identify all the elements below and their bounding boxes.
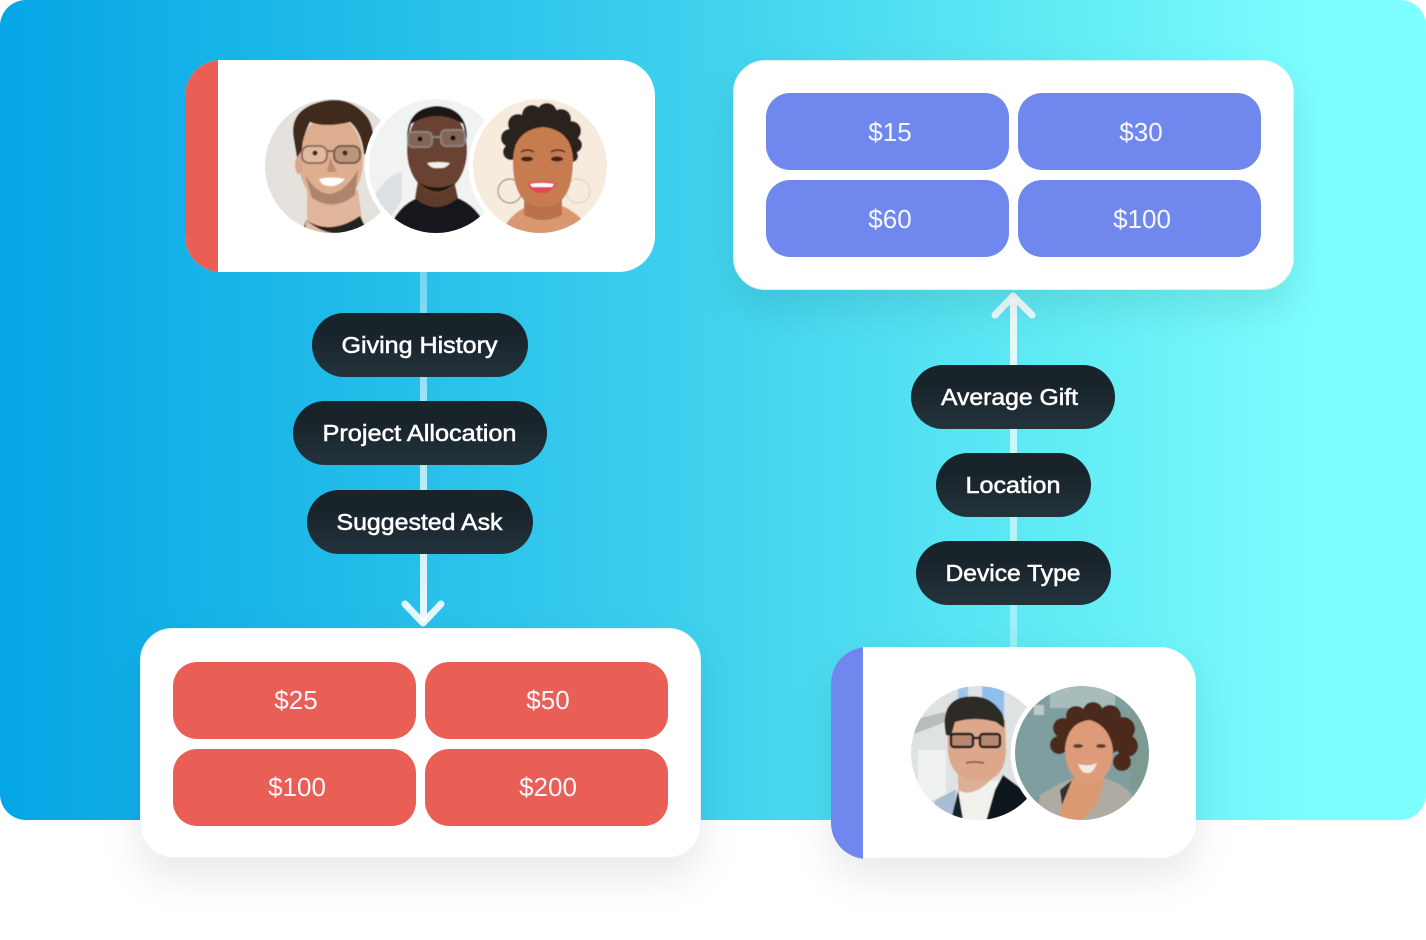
panel: donor group with three portraits: [185, 60, 655, 272]
pill: Device Type: [916, 541, 1111, 605]
amount button $25: $25: [274, 685, 318, 715]
amount button $15: $15: [868, 117, 912, 147]
amount button $30: [1018, 93, 1261, 170]
amount button $100: [173, 749, 416, 826]
portrait: woman with curly brown hair: [1010, 682, 1154, 824]
amount button $60: $60: [868, 204, 912, 234]
amount button $15: [766, 93, 1009, 170]
pill: Giving History: Giving History: [342, 332, 498, 358]
amount button $60: [766, 180, 1009, 257]
amount button $200: $200: [519, 772, 577, 802]
portrait: man in black shirt: [364, 94, 508, 238]
pill: Suggested Ask: [307, 490, 533, 554]
pill: Giving History: [312, 313, 528, 377]
amount button $50: $50: [526, 685, 570, 715]
amount button $50: [425, 662, 668, 739]
pill: Project Allocation: Project Allocation: [322, 420, 516, 446]
pill: Location: Location: [966, 472, 1060, 498]
amount button $25: [173, 662, 416, 739]
amount button $30: $30: [1119, 117, 1163, 147]
panel: donor group with two portraits: [831, 647, 1196, 859]
pill: Average Gift: Average Gift: [941, 384, 1078, 410]
pill: Location: [936, 453, 1091, 517]
connector arrow: donor card up to blue amounts: [995, 296, 1032, 648]
pill: Device Type: Device Type: [946, 560, 1080, 586]
panel: red suggested amounts: [140, 628, 700, 858]
connector arrow: donor card down to red amounts: [405, 272, 441, 623]
amount button $100: $100: [268, 772, 326, 802]
pill: Project Allocation: [293, 401, 547, 465]
portrait: man with black glasses and blazer: [911, 686, 1027, 820]
portrait: man with glasses and brown hair: [265, 99, 381, 233]
red accent strip: [185, 60, 218, 272]
portrait: woman with short curly hair: [468, 94, 612, 238]
amount button $100: [1018, 180, 1261, 257]
amount button $200: [425, 749, 668, 826]
panel: blue suggested amounts: [734, 60, 1294, 290]
amount button $100: $100: [1113, 204, 1171, 234]
pill: Average Gift: [911, 365, 1115, 429]
blue accent strip: [831, 647, 863, 859]
pill: Suggested Ask: Suggested Ask: [336, 509, 503, 535]
